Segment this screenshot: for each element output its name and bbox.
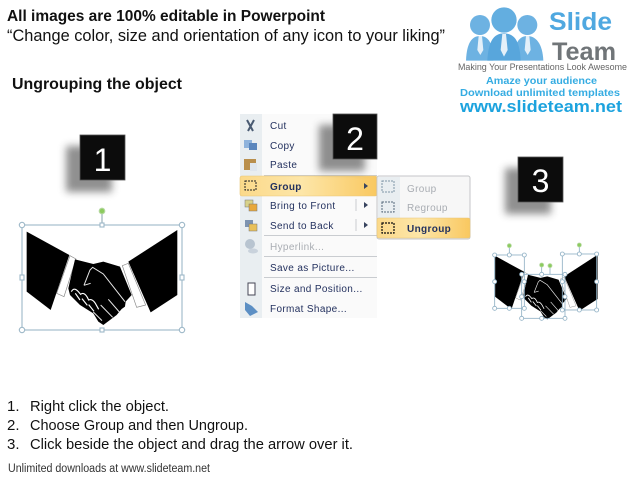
title line 1: All images are 100% editable in Powerpoint (7, 8, 326, 25)
heading: Ungrouping the object (12, 76, 183, 93)
menu panel (240, 114, 377, 318)
handshake selected object (19, 208, 185, 333)
step 1 badge: 1 (94, 142, 111, 178)
ungroup highlight (377, 218, 470, 238)
instructions list: Right click the object. (30, 398, 169, 415)
menu labels: Copy (270, 141, 295, 152)
submenu arrows (364, 183, 368, 228)
menu labels: Cut (270, 121, 287, 132)
ungrouped handshake (493, 243, 599, 320)
group row highlight (240, 176, 377, 196)
menu labels: Bring to Front (270, 201, 335, 212)
menu labels: Send to Back (270, 221, 334, 232)
logo url: www.slideteam.net (459, 98, 623, 116)
title line 2: “Change color, size and orientation of any icon to your liking” (7, 26, 445, 45)
logo line: amaze: Amaze your audience (486, 76, 597, 87)
separators (264, 176, 377, 278)
logo line: download: Download unlimited templates (460, 88, 620, 99)
logo tagline: Making Your Presentations Look Awesome (458, 62, 627, 72)
ungrouped icon (495, 255, 598, 319)
step 2 badge: 2 (346, 121, 364, 157)
context menu: Ungroup (407, 224, 451, 235)
menu labels: Group (270, 182, 302, 193)
logo word Team: Team (552, 38, 616, 66)
logo: SlideTeam (458, 7, 627, 116)
context menu (240, 114, 470, 318)
step 3 badge (505, 157, 563, 214)
menu labels: Hyperlink... (270, 242, 324, 253)
step 2 badge (319, 114, 377, 171)
menu labels: Format Shape... (270, 304, 347, 315)
menu labels: Size and Position... (270, 284, 363, 295)
submenu icons (382, 181, 394, 192)
instructions list: Click beside the object and drag the arrow over it. (30, 436, 353, 453)
menu labels (270, 121, 363, 315)
submenu labels: Group (407, 184, 437, 195)
instructions list (7, 398, 353, 453)
submenu panel (377, 176, 470, 239)
step 1 badge (66, 135, 125, 192)
instructions list: 2. (7, 417, 20, 434)
icon: three people (466, 7, 543, 61)
handshake icon (27, 230, 177, 325)
menu labels: Paste (270, 160, 297, 171)
selection box and handles (19, 208, 185, 333)
instructions list: 1. (7, 398, 20, 415)
logo word Slide: Slide (549, 8, 612, 36)
step 3 badge: 3 (532, 163, 549, 199)
footer: Unlimited downloads at www.slideteam.net (8, 463, 211, 475)
menu icons (244, 120, 258, 316)
instructions list: 3. (7, 436, 20, 453)
instructions list: Choose Group and then Ungroup. (30, 417, 248, 434)
context menu: Regroup (407, 203, 448, 214)
selection boxes (493, 243, 599, 320)
menu labels: Save as Picture... (270, 263, 355, 274)
